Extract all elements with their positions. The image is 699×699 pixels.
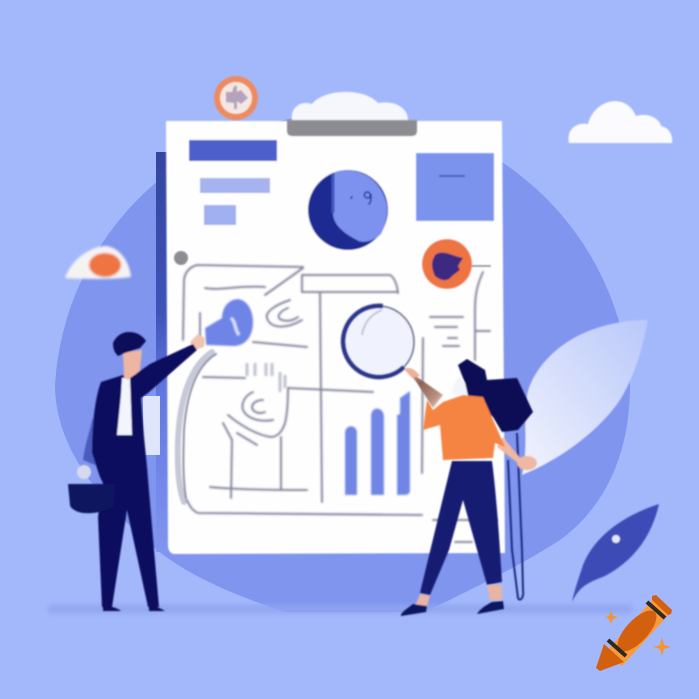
board back edge <box>156 152 176 552</box>
woman arm right <box>497 437 520 463</box>
clip <box>287 92 417 136</box>
man hair <box>113 332 146 356</box>
man back sleeve <box>83 417 105 467</box>
clip cloud <box>292 92 408 121</box>
square dash <box>439 175 465 177</box>
title bar <box>189 140 277 161</box>
strap <box>508 433 523 600</box>
crayon body <box>606 597 671 666</box>
backpack hair <box>458 359 533 432</box>
spark right <box>653 637 671 656</box>
woman face <box>452 376 468 396</box>
cloud <box>569 101 672 143</box>
blue square <box>416 153 494 221</box>
woman hand right <box>517 456 537 470</box>
spark left <box>605 611 618 624</box>
woman arm <box>407 370 443 408</box>
back panel <box>143 396 160 455</box>
crayon logo <box>596 595 672 671</box>
sketch letters <box>247 363 285 392</box>
man figure <box>68 332 205 611</box>
ankles <box>415 585 502 606</box>
shoes <box>401 601 504 616</box>
bar chart <box>345 391 410 495</box>
crayon label oval <box>611 604 663 658</box>
man shirt and tie <box>117 378 132 435</box>
ground shadow <box>48 605 633 613</box>
shirt <box>423 395 505 460</box>
man raised hand <box>190 334 205 350</box>
woman figure <box>401 359 537 616</box>
clipboard sheet <box>166 121 505 554</box>
man body <box>92 344 197 607</box>
top badge <box>214 76 258 120</box>
small leaf <box>572 504 659 602</box>
orange badge <box>422 239 491 289</box>
left bubble <box>65 246 131 279</box>
sketch sweep <box>178 352 216 502</box>
crayon stripes <box>608 602 665 656</box>
subtitle bar <box>200 178 270 193</box>
clip bar <box>287 120 417 136</box>
man shoes <box>103 606 165 611</box>
crayon tip <box>596 644 624 671</box>
crayon end <box>652 595 672 615</box>
man bag <box>68 484 115 513</box>
background circle <box>55 114 630 612</box>
pants <box>420 461 502 595</box>
small gear <box>174 251 188 265</box>
large leaf <box>522 320 648 475</box>
magnifying glass <box>342 306 414 378</box>
blue bulb <box>205 299 253 346</box>
woman hand <box>404 368 420 378</box>
bubble dot <box>89 253 121 277</box>
man head <box>123 350 142 380</box>
globe circle <box>308 170 388 250</box>
sketch chart outline <box>183 265 497 542</box>
man hand <box>77 465 91 479</box>
small bar <box>204 205 236 225</box>
